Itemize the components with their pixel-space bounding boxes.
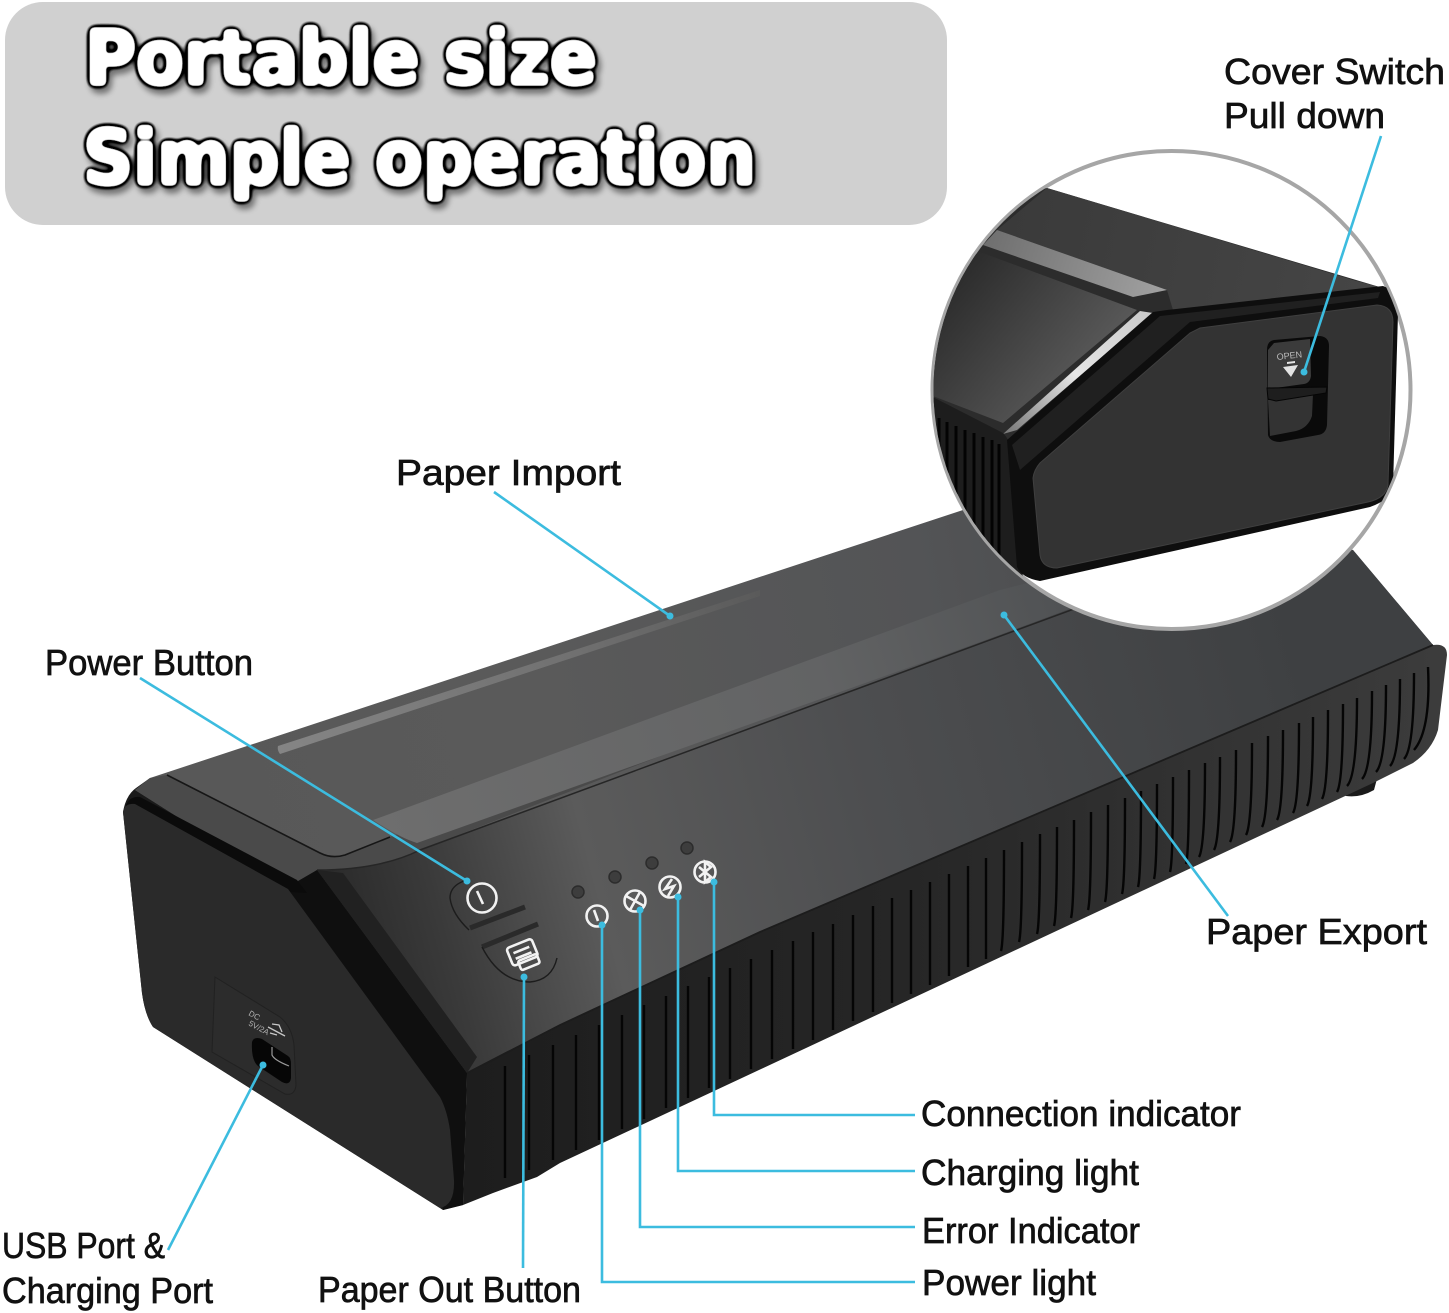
callout: connection indicator bbox=[710, 878, 1241, 1134]
printer foot bbox=[1340, 775, 1378, 796]
vent face bbox=[463, 645, 1447, 1205]
usb symbol bbox=[268, 1024, 285, 1036]
paper export divider bbox=[317, 592, 1120, 870]
callout: paper out button: Paper Out Button bbox=[318, 1269, 581, 1310]
end panel bbox=[123, 804, 454, 1208]
top surface bbox=[135, 490, 1433, 1073]
inset open text: OPEN bbox=[1276, 349, 1303, 362]
callout: power light bbox=[598, 922, 1096, 1303]
callout: cover switch bbox=[1224, 51, 1445, 376]
inset side panel bbox=[1033, 305, 1393, 568]
callout: paper import bbox=[396, 452, 674, 620]
callout: power button bbox=[45, 642, 470, 884]
port text dc: DC bbox=[247, 1009, 262, 1022]
inset black body bbox=[1007, 286, 1398, 581]
paper out button bbox=[482, 924, 557, 982]
callout: charging light bbox=[674, 894, 1139, 1193]
callout: paper export: Paper Export bbox=[1206, 911, 1427, 952]
port text voltage: 5V/2A bbox=[247, 1019, 271, 1037]
lid highlight strip bbox=[278, 590, 760, 754]
control buttons and indicators bbox=[450, 842, 716, 982]
callout: error indicator: Error Indicator bbox=[922, 1210, 1140, 1251]
callout: usb port and charging port bbox=[2, 1062, 266, 1311]
led dots bbox=[572, 842, 693, 898]
inset chamfer bbox=[1012, 292, 1380, 470]
callout: paper import: Paper Import bbox=[396, 452, 621, 493]
icon: power light bbox=[586, 906, 608, 926]
end cap base bbox=[123, 778, 467, 1210]
inset light strip bbox=[983, 230, 1167, 297]
inset rear surface bbox=[997, 188, 1383, 310]
callout: paper out button bbox=[318, 974, 581, 1310]
inset cover switch bbox=[1267, 336, 1329, 442]
title: portable size: Portable size bbox=[85, 13, 597, 102]
front edge line bbox=[467, 645, 1433, 1073]
label: pull down: Pull down bbox=[1224, 95, 1385, 136]
callout: charging light: Charging light bbox=[921, 1152, 1139, 1193]
cover switch inset circle bbox=[920, 151, 1410, 629]
corner chamfer bbox=[317, 870, 477, 1073]
callout: connection indicator: Connection indicator bbox=[921, 1093, 1241, 1134]
icon: error indicator bbox=[624, 890, 646, 912]
inset top panel bbox=[925, 252, 1137, 423]
inset open arrow bbox=[1283, 361, 1298, 377]
icon: charging light bbox=[660, 876, 680, 898]
callout: error indicator bbox=[636, 906, 1140, 1251]
label: cover switch: Cover Switch bbox=[1224, 51, 1445, 92]
control panel surface bbox=[317, 550, 1433, 1073]
icon: connection indicator bbox=[694, 862, 716, 882]
power button bbox=[450, 880, 525, 930]
rim below lid bbox=[135, 585, 1060, 888]
callout: paper export bbox=[1000, 612, 1427, 952]
inset vents bbox=[934, 398, 1023, 576]
label: charging port: Charging Port bbox=[2, 1270, 213, 1311]
micro usb socket bbox=[272, 1047, 289, 1066]
usb port opening bbox=[252, 1038, 291, 1083]
inset switch tab bbox=[1267, 387, 1327, 401]
black trim around end panel bbox=[286, 870, 467, 1210]
usb recess bbox=[212, 977, 296, 1094]
inset base bbox=[920, 188, 1383, 445]
title: simple operation: Simple operation bbox=[83, 113, 756, 202]
vent ribs bbox=[505, 667, 1428, 1178]
paper export band bbox=[373, 575, 1120, 843]
top slot bbox=[125, 797, 307, 893]
printer body bbox=[123, 490, 1447, 1210]
callout: power light: Power light bbox=[922, 1262, 1096, 1303]
label: usb port: USB Port & bbox=[2, 1225, 165, 1266]
inset chrome strip bbox=[1003, 311, 1153, 434]
title panel bbox=[5, 2, 947, 225]
callout: power button: Power Button bbox=[45, 642, 253, 683]
lid front edge bbox=[167, 775, 390, 857]
